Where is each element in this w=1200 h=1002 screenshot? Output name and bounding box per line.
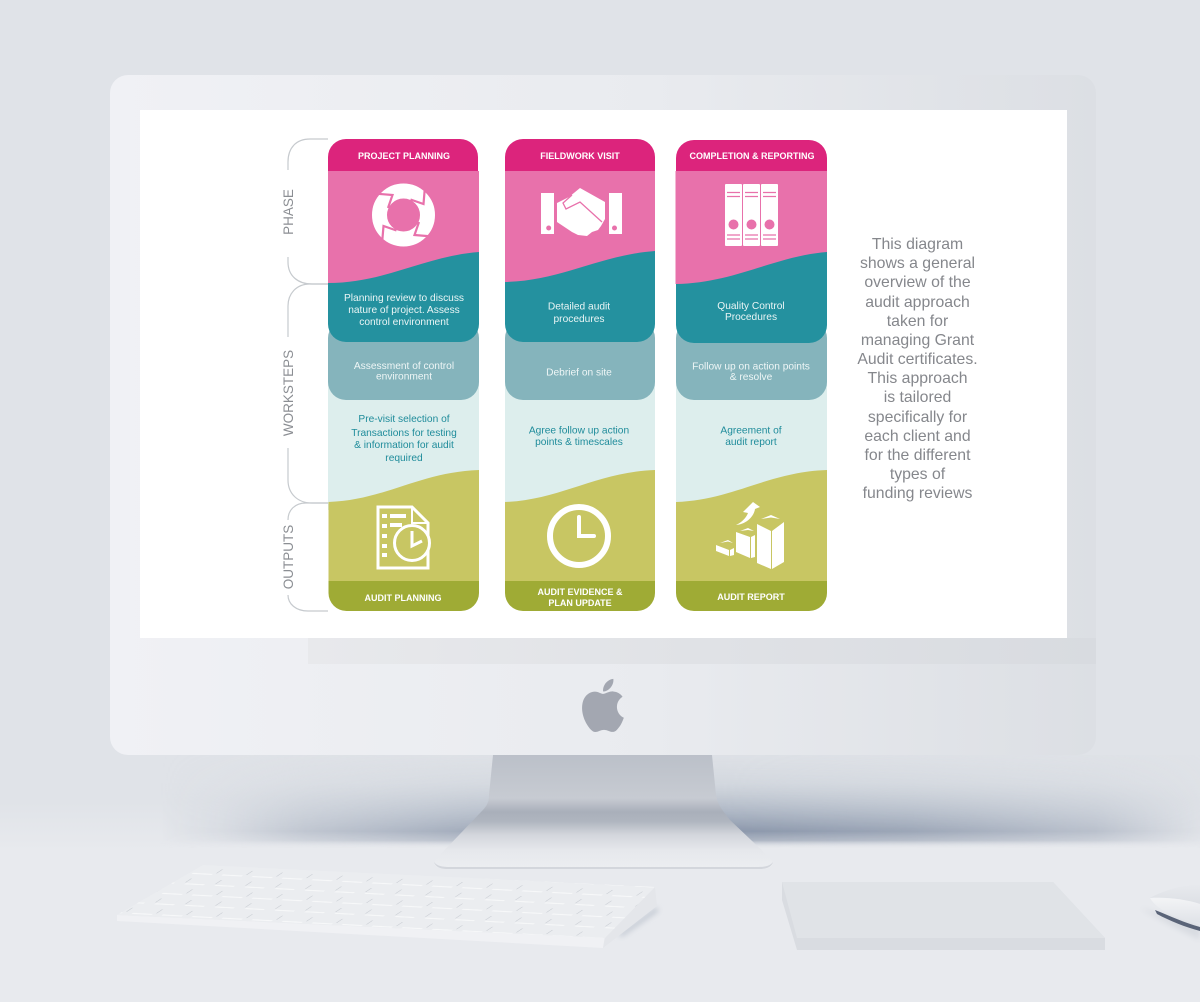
step text 3: points & timescales: [535, 437, 623, 448]
step text 3: Agreement of: [720, 426, 782, 436]
stand base rim: [434, 862, 773, 869]
description text: This approach: [867, 370, 968, 387]
description text: is tailored: [884, 389, 951, 406]
apple logo: [582, 679, 624, 732]
olive output: [505, 470, 655, 585]
description text: managing Grant: [861, 332, 975, 349]
footer text: AUDIT PLANNING: [364, 593, 442, 603]
step text 3: & information for audit: [354, 440, 454, 451]
step text 2: & resolve: [730, 372, 773, 383]
icon: binders: [725, 184, 778, 246]
olive output: [328, 470, 479, 585]
row label: worksteps: WORKSTEPS: [281, 350, 296, 436]
monitor body: [110, 75, 1096, 755]
monitor stand: [434, 755, 773, 869]
step text 1: Detailed audit: [548, 302, 610, 312]
olive output: [676, 470, 827, 585]
description text: taken for: [887, 313, 948, 330]
step text 1: Planning review to discuss: [344, 293, 464, 304]
description text: each client and: [864, 428, 971, 445]
footer text: AUDIT REPORT: [717, 592, 785, 602]
footer text: PLAN UPDATE: [548, 598, 612, 608]
description text: This diagram: [872, 236, 963, 253]
icon: document with clock: [378, 507, 430, 568]
lower screen band: [308, 638, 1096, 664]
step text 3: required: [385, 453, 423, 464]
step text 3: Pre-visit selection of: [358, 414, 450, 425]
description text: audit approach: [865, 294, 970, 311]
description text: overview of the: [864, 274, 971, 291]
header: [505, 139, 655, 171]
step text 1: nature of project. Assess: [348, 305, 460, 316]
description text: funding reviews: [863, 485, 972, 502]
output footer: [505, 581, 655, 611]
header text: PROJECT PLANNING: [358, 151, 450, 161]
footer text: AUDIT EVIDENCE &: [537, 587, 623, 597]
step text 3: Agree follow up action: [529, 426, 629, 436]
column: fieldwork visit: [505, 139, 655, 611]
description text: types of: [890, 466, 946, 483]
step text 1: Procedures: [725, 312, 777, 323]
screen: [140, 110, 1067, 638]
icon: clock: [550, 507, 608, 565]
step text 2: Follow up on action points: [692, 362, 810, 372]
step text 3: audit report: [725, 437, 777, 448]
output footer: [676, 581, 827, 611]
row label: outputs: OUTPUTS: [281, 525, 296, 589]
icon: rising bars: [716, 502, 784, 569]
description text: for the different: [865, 447, 971, 464]
trackpad: [782, 882, 1105, 950]
column: completion and reporting: [676, 140, 827, 611]
icon: cycle: [374, 186, 432, 244]
keyboard: [117, 865, 659, 948]
description text: specifically for: [868, 409, 967, 426]
monitor shadow on wall: [200, 768, 1195, 846]
description text: shows a general: [860, 255, 975, 272]
column: project planning: [328, 139, 479, 611]
description text: Audit certificates.: [857, 351, 978, 368]
header: [328, 139, 478, 171]
step text 1: control environment: [359, 317, 449, 328]
output footer: [328, 581, 479, 611]
step text 2: Debrief on site: [546, 368, 612, 378]
step text 3: Transactions for testing: [351, 428, 457, 439]
row brackets: [288, 139, 328, 611]
row label: phase: PHASE: [281, 189, 296, 235]
step text 2: environment: [376, 372, 432, 382]
header text: COMPLETION & REPORTING: [689, 151, 815, 161]
step text 1: Quality Control: [717, 301, 785, 312]
step text 1: procedures: [554, 314, 604, 325]
header: [676, 140, 827, 171]
icon: handshake: [541, 188, 622, 236]
header text: FIELDWORK VISIT: [540, 151, 620, 161]
mouse: [1140, 884, 1200, 940]
step text 2: Assessment of control: [354, 361, 454, 372]
